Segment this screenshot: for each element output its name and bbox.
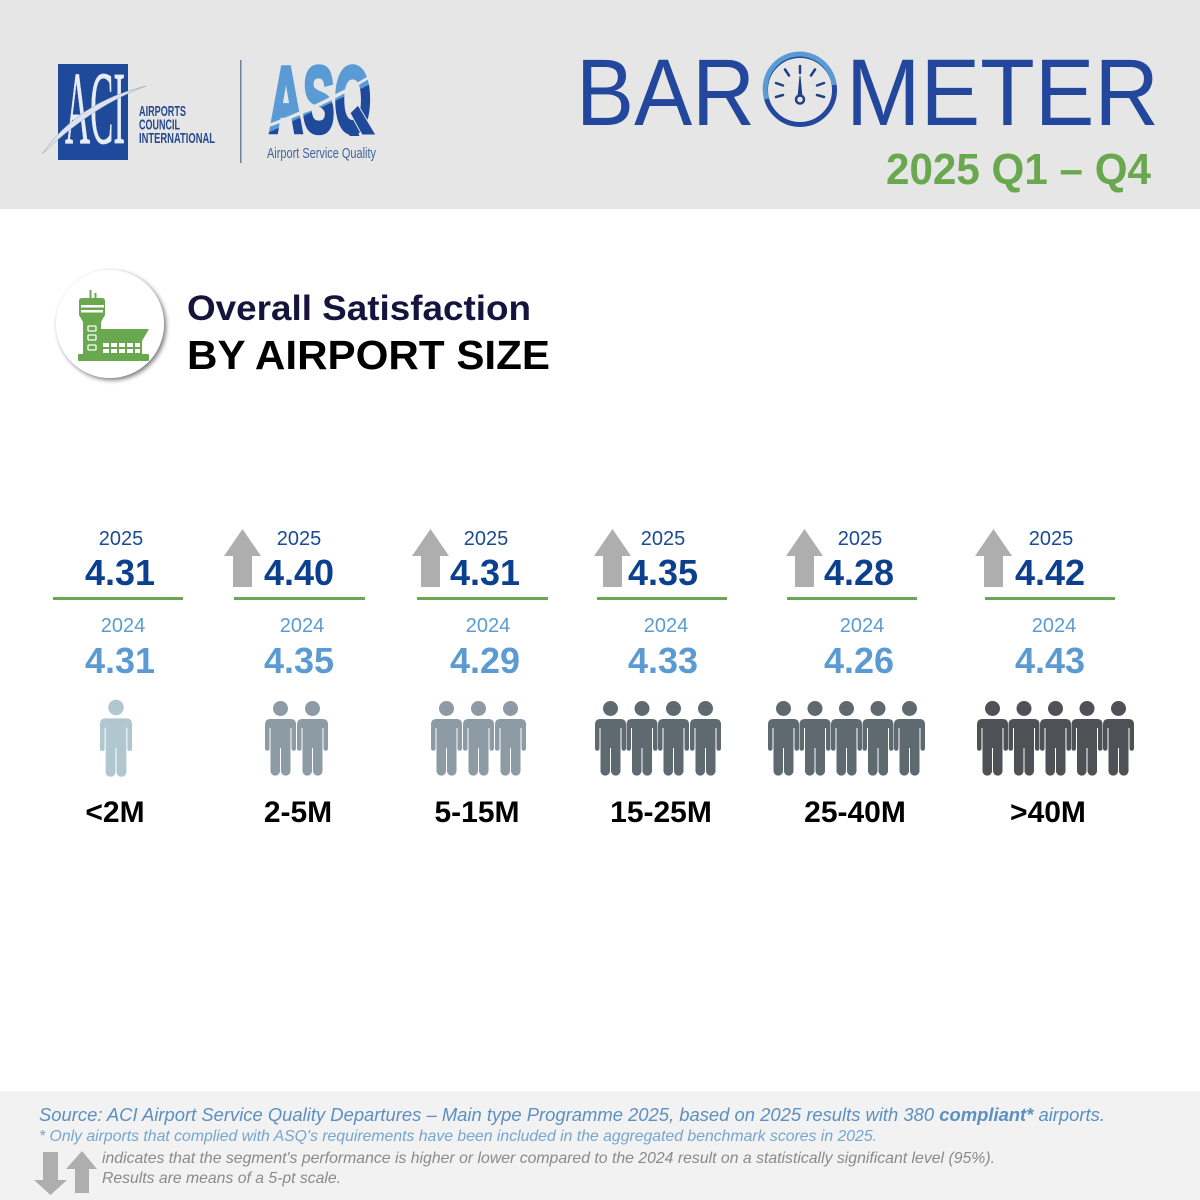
column: 5-15M: 5-15M [434, 796, 520, 829]
logo: ACI: INTERNATIONAL [139, 130, 215, 147]
column: over 40M: >40M [1010, 796, 1086, 829]
icon: four people [595, 701, 721, 776]
column: over 40M [975, 528, 1134, 829]
column: 2-5M: 2025 [277, 528, 321, 550]
column: 25-40M: 4.28 [824, 552, 894, 593]
column: under 2M: 4.31 [85, 552, 155, 593]
column: 25-40M [768, 528, 925, 829]
column: 5-15M: 4.29 [450, 640, 520, 681]
source note: Source: ACI Airport Service Quality Departures – Main type Programme 2025, based on 2025 results with 380 compliant* airports. [39, 1105, 1105, 1125]
arrow up [224, 529, 261, 587]
column: 15-25M: 2024 [644, 615, 688, 637]
scale note: Results are means of a 5-pt scale. [102, 1170, 341, 1187]
column: under 2M: <2M [85, 796, 145, 829]
column: 25-40M: 25-40M [804, 796, 906, 829]
icon: five people [768, 701, 925, 776]
icon: three people [431, 701, 526, 776]
column: 2-5M: 2024 [280, 615, 324, 637]
heading [187, 289, 550, 378]
column: 2-5M [224, 528, 365, 829]
column: 15-25M: 15-25M [610, 796, 712, 829]
column: under 2M: 2024 [101, 615, 145, 637]
column: over 40M: 2024 [1032, 615, 1076, 637]
arrow up [412, 529, 449, 587]
compliance note: * Only airports that complied with ASQ's requirements have been included in the aggregated benchmark scores in 2025. [39, 1128, 877, 1145]
column: 25-40M: 2025 [838, 528, 882, 550]
column: 15-25M: 2025 [641, 528, 685, 550]
barometer wordmark [576, 40, 1159, 146]
column: 2-5M: 2-5M [264, 796, 332, 829]
arrow up [786, 529, 823, 587]
column: 5-15M: 2024 [466, 615, 510, 637]
logo: ASQ: ASQ [269, 47, 371, 152]
barometer wordmark: METER [846, 40, 1159, 146]
column: 5-15M [412, 528, 548, 829]
logo: ACI: AIRPORTS [139, 103, 186, 120]
logo: ACI: COUNCIL [139, 116, 180, 134]
logo: ASQ [267, 64, 376, 161]
icon: one person [100, 700, 132, 777]
column: under 2M: 4.31 [85, 640, 155, 681]
icon: gauge [765, 54, 834, 124]
heading: Overall Satisfaction [187, 289, 531, 328]
column: 5-15M: 4.31 [450, 552, 520, 593]
column: 25-40M: 4.26 [824, 640, 894, 681]
column: 2-5M: 4.40 [264, 552, 334, 593]
logo: ASQ: Airport Service Quality [267, 146, 377, 162]
icon: airport terminal badge [56, 270, 164, 378]
heading: BY AIRPORT SIZE [187, 332, 550, 378]
logo: ACI: ACI [65, 51, 125, 166]
legend note: indicates that the segment's performance is higher or lower compared to the 2024 result on a statistically significant level (95%). [102, 1150, 995, 1167]
column: over 40M: 4.43 [1015, 640, 1085, 681]
icon: five people dark [977, 701, 1134, 776]
header band [0, 0, 1200, 209]
column: 15-25M: 4.35 [628, 552, 698, 593]
column: 15-25M [594, 528, 727, 829]
date range: 2025 Q1 – Q4 [886, 145, 1152, 194]
arrow up [594, 529, 631, 587]
column: under 2M [53, 528, 183, 829]
arrow up [975, 529, 1012, 587]
column: 5-15M: 2025 [464, 528, 508, 550]
column: 25-40M: 2024 [840, 615, 884, 637]
barometer wordmark: BAR [576, 40, 755, 146]
column: under 2M: 2025 [99, 528, 143, 550]
footer panel [0, 1091, 1200, 1200]
column: over 40M: 2025 [1029, 528, 1073, 550]
column: 2-5M: 4.35 [264, 640, 334, 681]
column: 15-25M: 4.33 [628, 640, 698, 681]
column: over 40M: 4.42 [1015, 552, 1085, 593]
icon: significance arrows [34, 1151, 97, 1195]
icon: two people [265, 701, 328, 776]
